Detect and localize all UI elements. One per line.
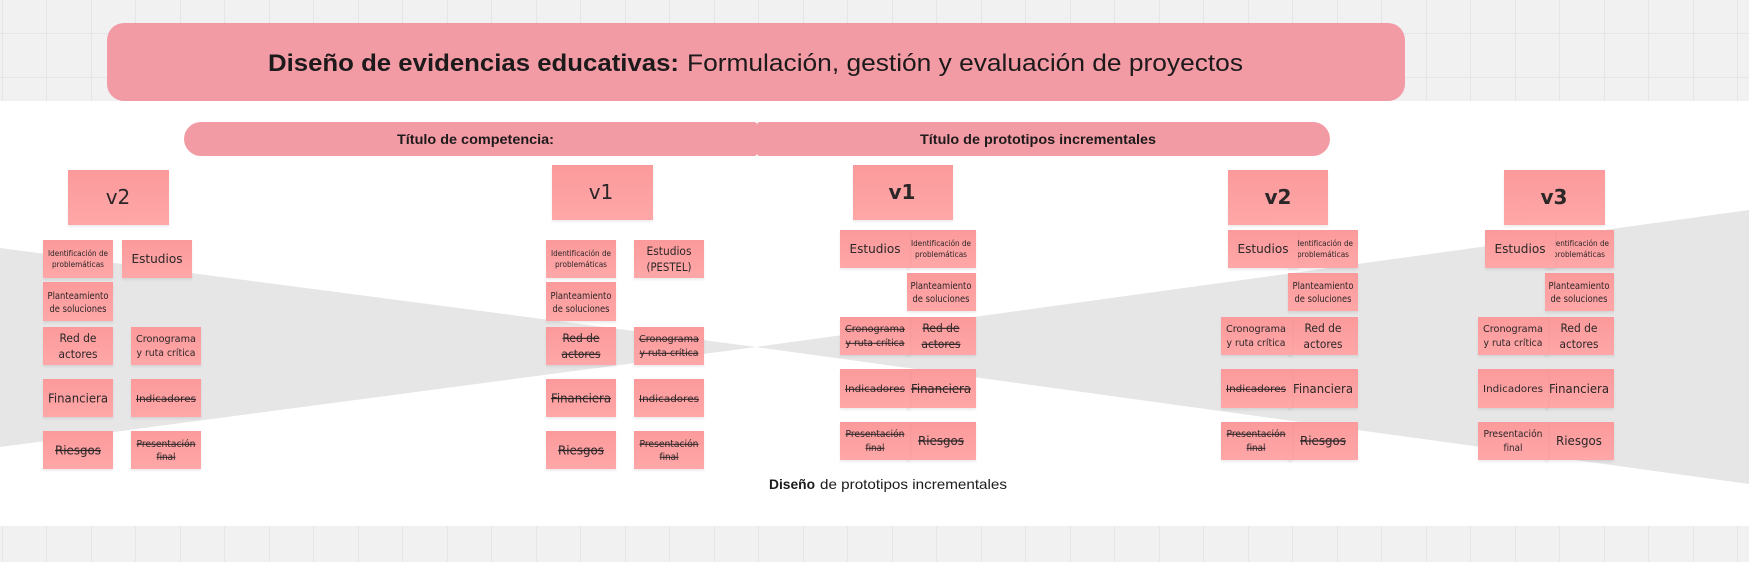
sticky: identificación de problemáticas: Identificación de: [551, 248, 611, 258]
sticky: presentación final tachado: Presentación: [640, 438, 698, 450]
sticky: cronograma tachado: [840, 317, 910, 355]
sticky: cronograma y ruta crítica: y ruta crítica: [136, 347, 196, 359]
sticky: identificación de problemáticas: Identificación de: [1293, 238, 1353, 248]
sticky: indicadores tachado: Indicadores: [136, 394, 196, 405]
sticky: indicadores tachado: [1221, 369, 1292, 408]
sticky: indicadores tachado: Indicadores: [845, 384, 905, 395]
sticky: indicadores tachado: Indicadores: [639, 394, 699, 405]
sticky: estudios: [122, 240, 192, 278]
sticky: identificación de problemáticas: [546, 240, 616, 278]
sticky: planteamiento de soluciones: [546, 282, 616, 321]
sticky: v2: v2: [106, 185, 130, 209]
sticky: estudios (PESTEL): Estudios: [646, 244, 692, 258]
sticky: riesgos tachado: [43, 431, 113, 469]
sticky: cronograma y ruta crítica: [1478, 317, 1548, 355]
sticky: financiera: [43, 379, 113, 417]
sticky: planteamiento de soluciones: [907, 273, 976, 311]
title banner: Formulación, gestión y evaluación de proyectos: [687, 50, 1243, 77]
sticky: financiera tachado: [907, 369, 976, 408]
sticky: planteamiento de soluciones: [1288, 273, 1358, 311]
sticky: cronograma y ruta crítica: Cronograma: [1483, 324, 1543, 335]
sticky: estudios: Estudios: [1238, 241, 1288, 256]
sticky: indicadores: [1478, 369, 1548, 408]
title banner: [107, 23, 1405, 101]
sticky: indicadores tachado: [634, 379, 704, 417]
sticky: estudios: Estudios: [1494, 241, 1546, 256]
sticky: red de actores: [1545, 317, 1614, 355]
sticky: estudios (PESTEL): [634, 240, 704, 278]
sticky: riesgos tachado: Riesgos: [1300, 433, 1346, 448]
sticky: cronograma y ruta crítica: [131, 327, 201, 365]
column: prototipo v1: [840, 165, 976, 460]
sticky: planteamiento de soluciones: [43, 282, 113, 321]
sticky: financiera: [1288, 369, 1358, 408]
sticky: planteamiento de soluciones: de soluciones: [50, 304, 107, 315]
column: prototipo v2: [1221, 170, 1358, 460]
sticky: v3: v3: [1541, 185, 1567, 209]
sticky: red de actores tachado: [907, 317, 976, 355]
heading bar: título de prototipos incrementales: Título de prototipos incrementales: [920, 132, 1156, 147]
gray bowtie background shape: [0, 210, 1749, 484]
heading bar: título de prototipos incrementales: [757, 122, 1330, 156]
caption: diseño de prototipos incrementales: Diseño: [769, 476, 815, 492]
sticky: financiera tachado: Financiera: [911, 381, 971, 396]
sticky: riesgos tachado: [907, 422, 976, 460]
sticky: identificación de problemáticas: Identificación de: [1549, 238, 1609, 248]
sticky: indicadores tachado: Indicadores: [1226, 384, 1286, 395]
sticky: financiera tachado: [546, 379, 616, 417]
sticky: planteamiento de soluciones: de soluciones: [1294, 294, 1352, 305]
sticky: planteamiento de soluciones: de soluciones: [912, 294, 970, 305]
caption: diseño de prototipos incrementales: de prototipos incrementales: [820, 476, 1007, 492]
sticky: identificación de problemáticas: problemáticas: [52, 260, 104, 269]
sticky: red de actores: Red de: [1560, 321, 1598, 335]
sticky: red de actores: [43, 327, 113, 365]
sticky: planteamiento de soluciones: Planteamiento: [1292, 281, 1354, 292]
sticky: identificación de problemáticas: [1288, 230, 1358, 268]
sticky: estudios: [840, 230, 910, 268]
sticky: identificación de problemáticas: Identificación de: [911, 238, 971, 248]
sticky: red de actores: [1288, 317, 1358, 355]
sticky: v3: [1504, 170, 1605, 225]
sticky: cronograma tachado: Cronograma: [639, 334, 699, 345]
sticky: presentación final tachado: final: [1246, 443, 1266, 454]
sticky: v1: v1: [589, 180, 613, 204]
sticky: cronograma tachado: [634, 327, 704, 365]
sticky: cronograma y ruta crítica: Cronograma: [136, 334, 196, 345]
sticky: presentación final: final: [1504, 443, 1522, 454]
sticky: riesgos: Riesgos: [1556, 433, 1602, 448]
sticky: identificación de problemáticas: problemáticas: [555, 260, 607, 269]
sticky: identificación de problemáticas: Identificación de: [48, 248, 108, 258]
sticky: red de actores tachado: actores: [562, 347, 600, 361]
sticky: red de actores: actores: [1304, 337, 1342, 351]
sticky: cronograma y ruta crítica: [1221, 317, 1292, 355]
sticky: identificación de problemáticas: [43, 240, 113, 278]
sticky: v1: v1: [889, 180, 915, 204]
sticky: riesgos tachado: [1288, 422, 1358, 460]
sticky: financiera: Financiera: [1549, 381, 1609, 396]
sticky: financiera: Financiera: [48, 390, 108, 406]
sticky: riesgos tachado: [546, 431, 616, 469]
sticky: planteamiento de soluciones: [1545, 273, 1614, 311]
sticky: estudios (PESTEL): (PESTEL): [646, 260, 692, 274]
sticky: presentación final: Presentación: [1484, 428, 1542, 440]
sticky: riesgos: [1545, 422, 1614, 460]
sticky: estudios: [1485, 230, 1555, 268]
sticky: identificación de problemáticas: [1545, 230, 1614, 268]
sticky: financiera: [1545, 369, 1614, 408]
sticky: v1: [853, 165, 953, 220]
column: prototipo v3: [1478, 170, 1614, 460]
sticky: riesgos tachado: Riesgos: [918, 433, 964, 448]
sticky: presentación final tachado: Presentación: [846, 428, 904, 440]
sticky: presentación final tachado: [840, 422, 910, 460]
white canvas panel: [0, 101, 1749, 526]
sticky: red de actores: actores: [58, 347, 98, 361]
sticky: financiera tachado: Financiera: [551, 390, 611, 406]
sticky: planteamiento de soluciones: Planteamiento: [1548, 281, 1610, 292]
sticky: planteamiento de soluciones: de soluciones: [1550, 294, 1608, 305]
sticky: financiera: Financiera: [1293, 381, 1353, 396]
sticky: indicadores tachado: [131, 379, 201, 417]
sticky: v1: [552, 165, 653, 220]
title banner: Diseño de evidencias educativas:: [268, 50, 679, 77]
sticky: planteamiento de soluciones: Planteamiento: [910, 281, 972, 292]
sticky: planteamiento de soluciones: Planteamiento: [550, 291, 612, 302]
sticky: identificación de problemáticas: problemáticas: [1297, 250, 1349, 259]
sticky: presentación final tachado: Presentación: [1226, 428, 1286, 440]
heading bar: título de competencia: Título de competencia:: [397, 132, 554, 147]
sticky: v2: [68, 170, 169, 225]
sticky: presentación final tachado: Presentación: [136, 438, 196, 450]
sticky: identificación de problemáticas: [907, 230, 976, 268]
sticky: presentación final tachado: [634, 431, 704, 469]
sticky: cronograma tachado: Cronograma: [845, 324, 905, 335]
sticky: red de actores tachado: Red de: [922, 321, 960, 335]
sticky: v2: v2: [1265, 185, 1291, 209]
sticky: presentación final: [1478, 422, 1548, 460]
sticky: indicadores: Indicadores: [1483, 384, 1543, 395]
sticky: presentación final tachado: [1221, 422, 1292, 460]
sticky: red de actores tachado: actores: [922, 337, 960, 351]
sticky: cronograma y ruta crítica: Cronograma: [1226, 324, 1286, 335]
sticky: red de actores tachado: Red de: [562, 331, 600, 345]
sticky: identificación de problemáticas: problemáticas: [1553, 250, 1605, 259]
sticky: estudios: [1228, 230, 1298, 268]
column: competencia v2: [43, 170, 201, 469]
sticky: cronograma tachado: y ruta crítica: [640, 347, 698, 359]
sticky: presentación final tachado: final: [660, 452, 678, 463]
sticky: cronograma y ruta crítica: y ruta crítica: [1484, 337, 1542, 349]
sticky: identificación de problemáticas: problemáticas: [915, 250, 967, 259]
sticky: planteamiento de soluciones: de soluciones: [552, 304, 610, 315]
heading bar: título de competencia: [184, 122, 757, 156]
sticky: v2: [1228, 170, 1328, 225]
sticky: presentación final tachado: [131, 431, 201, 469]
sticky: riesgos tachado: Riesgos: [55, 442, 101, 458]
sticky: red de actores: Red de: [1304, 321, 1342, 335]
sticky: indicadores tachado: [840, 369, 910, 408]
sticky: presentación final tachado: final: [866, 443, 884, 454]
sticky: estudios: Estudios: [850, 241, 900, 256]
sticky: presentación final tachado: final: [156, 452, 176, 463]
sticky: riesgos tachado: Riesgos: [558, 442, 604, 458]
sticky: cronograma tachado: y ruta crítica: [846, 337, 904, 349]
sticky: cronograma y ruta crítica: y ruta crítica: [1226, 337, 1286, 349]
sticky: red de actores: actores: [1560, 337, 1598, 351]
sticky: planteamiento de soluciones: Planteamiento: [48, 291, 109, 302]
sticky: estudios: Estudios: [132, 251, 182, 266]
sticky: red de actores tachado: [546, 327, 616, 365]
column: competencia v1: [546, 165, 704, 469]
sticky: red de actores: Red de: [60, 331, 96, 345]
